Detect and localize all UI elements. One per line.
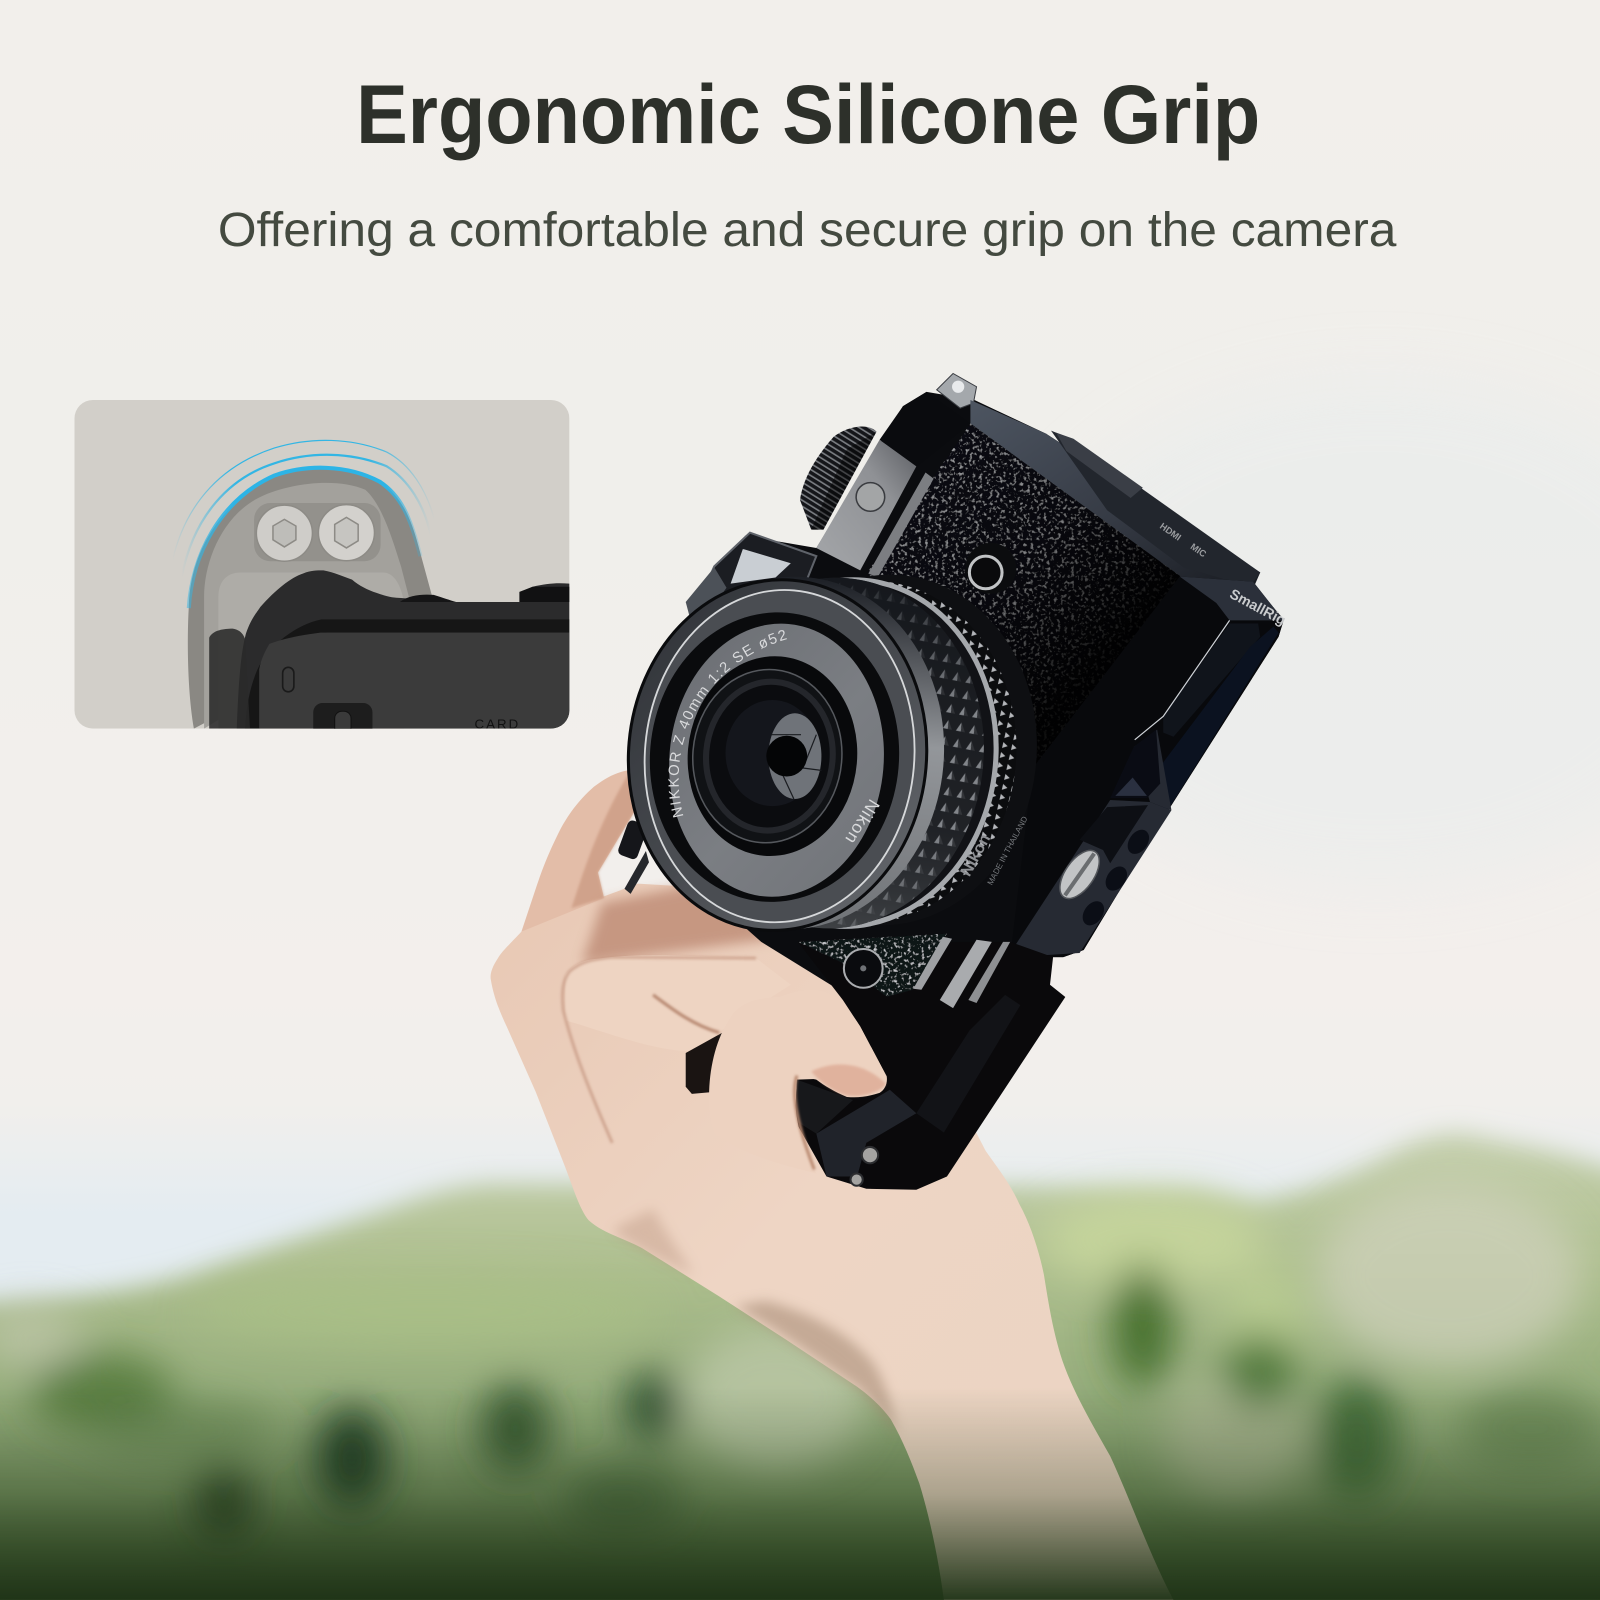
camera frame <box>245 619 569 729</box>
dial <box>800 427 877 530</box>
index finger <box>521 770 638 932</box>
iris blade lines <box>771 735 821 799</box>
lower body leather <box>798 934 947 997</box>
small knurl <box>704 568 1031 936</box>
third finger <box>565 955 791 1051</box>
finger crease <box>653 995 719 1033</box>
cage slot inner <box>1163 623 1260 737</box>
plate sheen <box>916 995 1020 1133</box>
cage top face <box>1180 577 1284 620</box>
cage bracket <box>686 533 816 633</box>
camera rear body <box>237 570 569 729</box>
bottom grip dark area <box>795 942 1065 1190</box>
grip leather <box>795 1080 853 1134</box>
made in thailand: MADE IN THAILAND <box>986 815 1030 887</box>
subheading: Offering a comfortable and secure grip on the camera <box>218 204 1397 257</box>
pale right side <box>1316 1184 1582 1367</box>
mounting holes <box>1078 826 1153 929</box>
mounting screw <box>1052 844 1107 905</box>
bright lit foliage <box>1041 1194 1265 1286</box>
grip outer shape <box>188 468 434 729</box>
raised tab <box>1056 433 1143 498</box>
lens: NIKKOR Z 40mm 1:2 SE ø52 <box>668 630 787 818</box>
silver ring <box>687 567 1010 939</box>
top plate <box>970 400 1260 589</box>
handle screws <box>851 1147 878 1186</box>
rib lines <box>700 676 839 836</box>
screw left <box>256 505 312 561</box>
eyecup side <box>209 629 250 729</box>
iris blades <box>768 713 821 799</box>
iris dark <box>726 700 819 806</box>
card label: CARD <box>474 717 520 732</box>
lever knob <box>617 819 649 861</box>
blue arc outer <box>176 440 432 550</box>
shutter button <box>856 483 885 511</box>
white hairline <box>631 579 928 934</box>
hot shoe and dial detail <box>400 595 456 602</box>
mic label: MIC <box>1189 541 1208 559</box>
outer slot <box>1160 627 1279 810</box>
camera body silhouette <box>714 392 1284 1010</box>
narrow silver band <box>868 472 934 578</box>
inner black ring <box>679 649 866 863</box>
dark gap between fingers <box>686 1033 733 1094</box>
raised top panel <box>1051 431 1260 587</box>
body brand: Nikon <box>957 831 994 879</box>
thumb crease <box>795 1076 814 1169</box>
hand and arm <box>491 770 1173 1600</box>
screw recess <box>254 503 381 561</box>
black ring <box>638 602 911 912</box>
silver stripe one <box>913 937 952 990</box>
cut out triangle <box>1110 730 1160 798</box>
right cage plate <box>1010 577 1284 957</box>
cage hairline <box>1135 620 1230 740</box>
palm crease shading <box>612 1209 694 1276</box>
oval indicator <box>283 667 294 692</box>
cut out sheen <box>1115 778 1147 796</box>
side plate <box>1010 800 1171 957</box>
heading: Ergonomic Silicone Grip <box>356 67 1260 161</box>
gray annulus <box>658 615 895 906</box>
blue arc middle <box>182 455 431 577</box>
blue arc inner <box>189 468 420 608</box>
screw right <box>318 505 374 561</box>
photo: hand holding camera <box>490 372 1288 1600</box>
wrist shading <box>735 1301 898 1439</box>
switch button <box>313 703 372 729</box>
third finger outline <box>562 957 756 1143</box>
silver stripe three <box>968 942 1010 1003</box>
smallrig logo: SmallRig <box>1227 586 1288 629</box>
front rim <box>614 567 941 943</box>
dark foliage <box>1112 1263 1173 1390</box>
nikon text on lens: Nikon <box>841 796 884 848</box>
ribbed glass ring <box>686 663 849 849</box>
thumb tip shading <box>811 1065 886 1096</box>
side plate inset <box>1080 805 1148 863</box>
large knurl <box>667 565 998 941</box>
index finger shading <box>571 776 638 908</box>
thumb <box>709 990 887 1173</box>
metal shoulder <box>880 392 970 466</box>
lens text <box>679 635 806 816</box>
side plate rib <box>1134 730 1171 810</box>
inner plate <box>204 483 410 729</box>
pupil <box>766 736 807 777</box>
leather body <box>867 423 1181 768</box>
inset panel: silicone grip detail <box>74 400 569 744</box>
bottom dark fade <box>0 1388 1600 1600</box>
lens <box>626 574 1037 930</box>
knurl shade <box>667 565 998 941</box>
leather shadow <box>867 423 1181 768</box>
rear screen <box>259 633 569 729</box>
lower recess <box>218 572 403 638</box>
lug <box>937 373 977 408</box>
lower strap button <box>844 949 883 988</box>
lever behind index finger <box>624 851 649 894</box>
hdmi label: HDMI <box>1158 521 1183 543</box>
handle cylinder <box>816 1090 916 1177</box>
metal strip <box>816 440 916 570</box>
lens back ring <box>720 562 1051 938</box>
knuckle shadow under lens <box>582 883 776 964</box>
strap button upper <box>965 543 1016 594</box>
silver stripe two <box>940 940 992 1008</box>
silver band <box>625 564 959 942</box>
